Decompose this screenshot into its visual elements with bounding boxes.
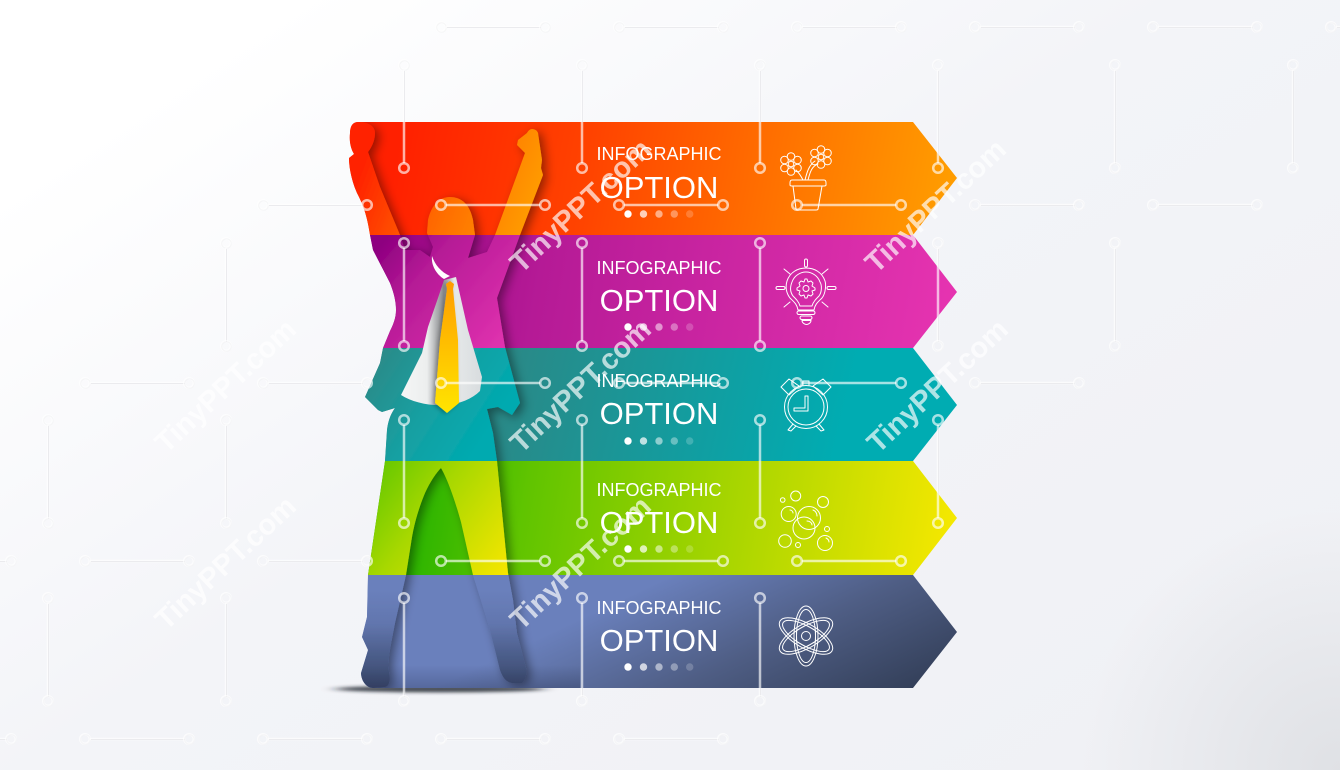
option 3 text — [596, 371, 722, 431]
watermark: TinyPPT.com: TinyPPT.com — [504, 133, 658, 279]
watermark: TinyPPT.com: TinyPPT.com — [149, 313, 303, 459]
option 2 text: OPTION — [600, 283, 718, 318]
panel: option bands with man silhouette — [340, 122, 960, 688]
option 3 text: OPTION — [600, 396, 718, 431]
option 1 text: OPTION — [600, 170, 718, 205]
option 4 text: INFOGRAPHIC — [596, 480, 722, 500]
icon: atom — [774, 606, 838, 666]
option 2 dots — [624, 323, 693, 331]
option 3 dots — [624, 437, 693, 445]
option 5 dots — [624, 663, 693, 671]
band 3 teal — [365, 348, 957, 461]
background corner shade — [1040, 470, 1340, 770]
tie — [435, 281, 459, 413]
option 3 text: INFOGRAPHIC — [596, 371, 722, 391]
icon: light bulb with gear — [776, 259, 836, 324]
option 5 text — [596, 598, 722, 658]
watermark: TinyPPT.com: TinyPPT.com — [859, 133, 1013, 279]
option 4 text: OPTION — [600, 505, 718, 540]
option 2 text — [596, 258, 722, 318]
option 2 text: INFOGRAPHIC — [596, 258, 722, 278]
option 1 dots — [624, 210, 693, 218]
option 4 text — [596, 480, 722, 540]
icon: alarm clock — [781, 379, 831, 431]
option 1 text: INFOGRAPHIC — [596, 144, 722, 164]
option 4 dots — [624, 545, 693, 553]
watermark: TinyPPT.com: TinyPPT.com — [504, 490, 658, 636]
man shirt and tie — [401, 277, 482, 413]
shirt — [401, 277, 482, 405]
band 5 blue — [361, 575, 957, 688]
ground shadow — [335, 686, 545, 692]
option 1 text — [596, 144, 722, 205]
icon: flower pot — [781, 146, 831, 210]
band 4 green — [368, 461, 957, 575]
band 1 orange — [349, 122, 957, 235]
watermark: TinyPPT.com — [149, 133, 1015, 636]
man collar — [432, 256, 450, 279]
icon: bubbles — [779, 491, 832, 550]
band 2 magenta — [370, 235, 957, 348]
watermark: TinyPPT.com: TinyPPT.com — [504, 313, 658, 459]
option 5 text: INFOGRAPHIC — [596, 598, 722, 618]
option 5 text: OPTION — [600, 623, 718, 658]
watermark: TinyPPT.com: TinyPPT.com — [861, 313, 1015, 459]
watermark: TinyPPT.com: TinyPPT.com — [149, 490, 303, 636]
